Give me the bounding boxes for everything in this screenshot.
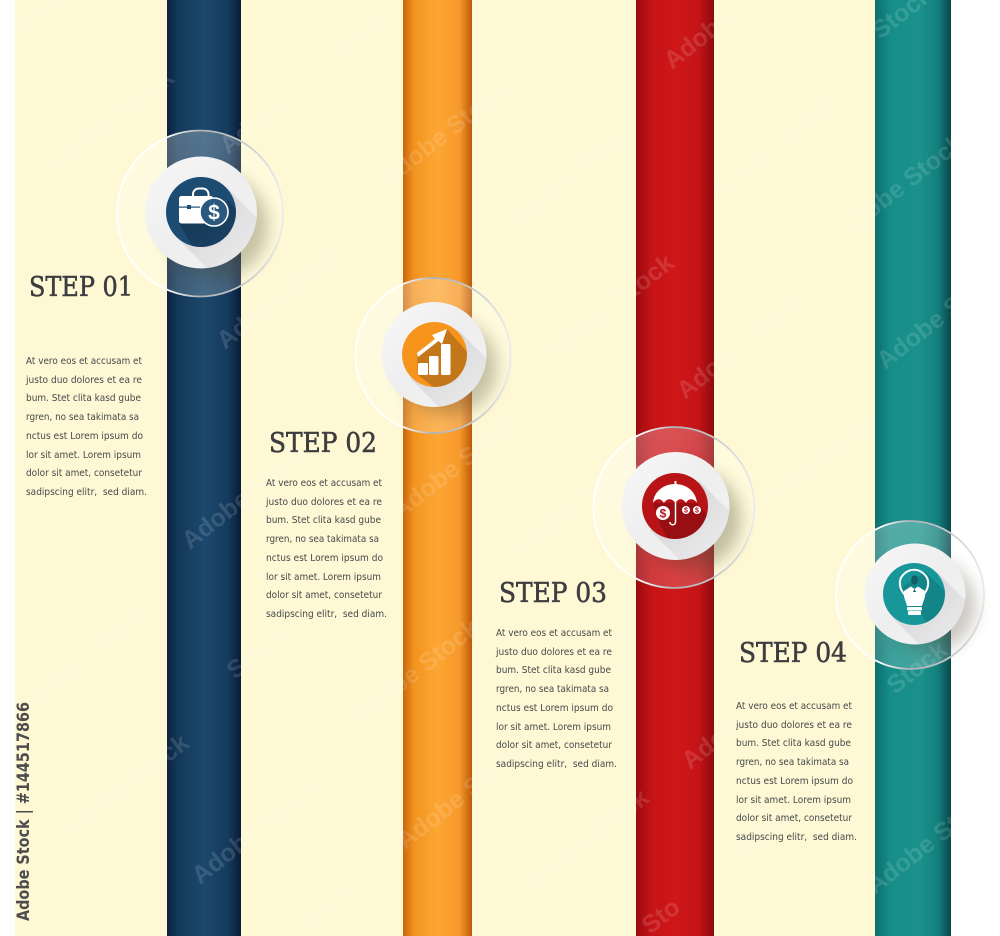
icon: umbrella with coins (653, 481, 701, 525)
stock watermark pattern: Adobe Stock (346, 614, 484, 730)
step 01 body text: sadipscing elitr, sed diam. (26, 487, 147, 498)
column bar: orange (403, 0, 472, 936)
step 02 body text: lor sit amet. Lorem ipsum (266, 572, 381, 583)
step 02 body text: sadipscing elitr, sed diam. (266, 609, 387, 620)
step 04 body text: justo duo dolores et ea re (735, 720, 852, 731)
step 04 body text: bum. Stet clita kasd gube (736, 738, 851, 749)
step 03 body text: justo duo dolores et ea re (495, 647, 612, 658)
step 02 body text: justo duo dolores et ea re (265, 497, 382, 508)
stock watermark pattern: Adobe Stock (861, 784, 999, 900)
step 02 body text: bum. Stet clita kasd gube (266, 515, 381, 526)
stock watermark pattern: Adobe Stock (391, 739, 529, 855)
step 03 body text: sadipscing elitr, sed diam. (496, 759, 617, 770)
stock watermark pattern: Adobe Stock (186, 774, 324, 890)
stock watermark pattern: Adobe Stock (516, 784, 654, 900)
step 04 body text: lor sit amet. Lorem ipsum (736, 795, 851, 806)
step 03 body text: rgren, no sea takimata sa (496, 684, 609, 695)
step 02 body text: nctus est Lorem ipsum do (266, 553, 383, 564)
badge 4: lightbulb person (835, 520, 985, 670)
step 03 body text (495, 628, 617, 770)
white plate (864, 544, 966, 644)
step 01 body text: rgren, no sea takimata sa (26, 412, 139, 423)
icon disc (642, 473, 708, 539)
step 04 body text: sadipscing elitr, sed diam. (736, 832, 857, 843)
stock watermark pattern: Adobe Stock (56, 729, 194, 845)
glass ring (594, 427, 754, 588)
column bar: teal (875, 0, 951, 936)
stock watermark pattern: Adobe Stock (741, 409, 879, 525)
step 02 body text (265, 478, 387, 620)
icon: briefcase with dollar coin: $ (208, 202, 220, 224)
icon: umbrella with coins: $ (684, 508, 688, 514)
step 01 body text: At vero eos et accusam et (26, 356, 142, 367)
icon long shadow (417, 329, 467, 387)
stock watermark pattern: Adobe Stock (706, 89, 844, 205)
stock watermark pattern: Adobe Stock (541, 249, 679, 365)
step 01 body text: nctus est Lorem ipsum do (26, 431, 143, 442)
icon: briefcase with dollar coin (179, 188, 228, 226)
stock watermark pattern: Adobe Stock (211, 239, 349, 355)
white plate (622, 452, 730, 560)
plate long shadow (176, 187, 256, 268)
stock watermark pattern: Adobe Stock (506, 449, 644, 565)
icon: umbrella with coins: $ (695, 508, 699, 514)
plate long shadow (410, 330, 486, 406)
step 01 body text: bum. Stet clita kasd gube (26, 393, 141, 404)
glass ring (117, 130, 283, 296)
stock watermark pattern: Adobe Stock (831, 129, 969, 245)
plate long shadow (892, 572, 965, 644)
plate shadow (401, 319, 497, 415)
stock watermark pattern: Stock (881, 636, 952, 700)
stock watermark pattern: Adobe Stock (374, 77, 512, 193)
step 01 body text: justo duo dolores et ea re (25, 375, 142, 386)
step 04 heading: STEP 04 (739, 638, 847, 669)
stock watermark pattern: Adobe Stock (41, 64, 179, 180)
step 03 body text: dolor sit amet, consetetur (496, 740, 612, 751)
step 03 body text: bum. Stet clita kasd gube (496, 665, 611, 676)
plate shadow (884, 560, 976, 652)
icon long shadow (179, 200, 236, 247)
stock watermark pattern: Adobe (658, 5, 737, 75)
column bar: navy (167, 0, 241, 936)
stock watermark pattern: Adobe Stock (671, 289, 809, 405)
white plate (145, 156, 257, 268)
stock watermark pattern: Adobe Stock (726, 749, 864, 865)
step 04 body text (735, 701, 857, 843)
badge 1: briefcase (117, 130, 290, 301)
step 01 heading: STEP 01 (29, 272, 133, 303)
icon: bulb with person (900, 570, 928, 615)
stock watermark pattern: Adobe (214, 90, 293, 160)
step 03 body text: At vero eos et accusam et (496, 628, 612, 639)
icon: rising bars and arrow (417, 329, 450, 375)
step 02 heading: STEP 02 (269, 428, 377, 459)
stock watermark pattern: Adobe Stock (176, 439, 314, 555)
glass ring (836, 521, 984, 669)
stock watermark pattern: Adobe Stock (386, 409, 524, 525)
step 03 body text: nctus est Lorem ipsum do (496, 703, 613, 714)
white plate (382, 302, 486, 407)
icon disc (166, 177, 236, 247)
step 01 body text: lor sit amet. Lorem ipsum (26, 450, 141, 461)
stock watermark pattern: Adobe Stock (501, 119, 639, 235)
badge 3: umbrella (594, 427, 760, 592)
badge 2: growth chart (356, 278, 520, 440)
step 04 body text: nctus est Lorem ipsum do (736, 776, 853, 787)
icon disc (402, 322, 467, 387)
step 03 body text: lor sit amet. Lorem ipsum (496, 722, 611, 733)
column bar: red (636, 0, 714, 936)
step 02 body text: At vero eos et accusam et (266, 478, 382, 489)
vertical stock credit: Adobe Stock | #144517866 (14, 702, 34, 921)
step 04 body text: dolor sit amet, consetetur (736, 813, 852, 824)
stock watermark pattern: Adobe Stock (16, 599, 154, 715)
stock watermark pattern: Stock (326, 1, 397, 65)
step 04 body text: At vero eos et accusam et (736, 701, 852, 712)
stock watermark pattern: Adobe (676, 705, 755, 775)
plate long shadow (650, 481, 729, 560)
plate shadow (641, 469, 741, 569)
stock watermark pattern: Stock (221, 621, 292, 685)
icon disc (883, 563, 945, 625)
step 04 body text: rgren, no sea takimata sa (736, 757, 849, 768)
icon long shadow (653, 503, 707, 539)
glass ring (356, 278, 510, 433)
step 01 body text (25, 356, 147, 498)
step 03 heading: STEP 03 (499, 578, 607, 609)
step 02 body text: dolor sit amet, consetetur (266, 590, 382, 601)
icon long shadow (898, 572, 945, 622)
icon: umbrella with coins: $ (660, 506, 667, 520)
step 01 body text: dolor sit amet, consetetur (26, 468, 142, 479)
plate shadow (164, 174, 268, 278)
step 02 body text: rgren, no sea takimata sa (266, 534, 379, 545)
